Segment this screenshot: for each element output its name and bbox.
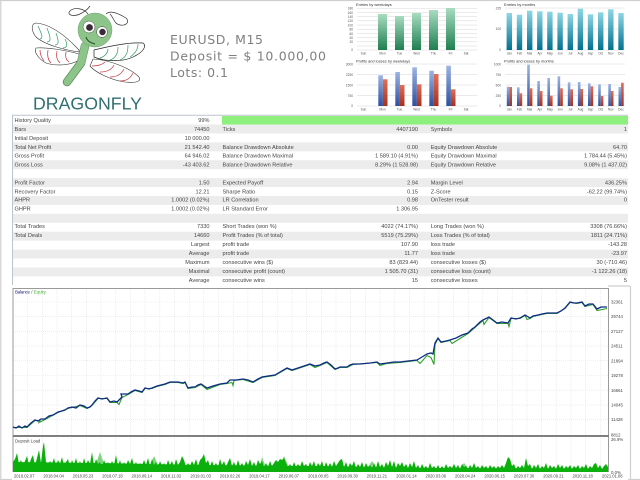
table column 2: values: 64 946.02 [185,154,210,160]
table column 2: values: Largest [191,242,210,248]
chart: entries by weekdays: 20 [349,40,353,44]
table column 3: labels: consecutive wins [222,278,265,284]
table column 2: values: 1.0002 (0.02%) [171,198,210,204]
chart: profits and losses by months: 750 [496,73,501,77]
date axis labels: 2018.11.02 [161,474,182,478]
table column 4: values: 4022 (74.17%) [381,224,418,230]
chart: entries by weekdays: Sat [464,52,469,56]
table column 3: labels: profit trade [222,242,249,248]
chart: entries by weekdays: Mon [379,52,386,56]
load axis labels: 0.0% [611,470,621,475]
chart: profits and losses by weekdays: Mon [379,108,386,112]
date axis labels: 2019.09.30 [337,474,359,478]
date axis labels: 2020.11.18 [573,474,594,478]
table column 4: values: 15 [412,278,418,284]
table column 3: labels: Expected Payoff [222,180,264,186]
date axis labels: 2020.03.06 [426,474,447,478]
icon: antennae [69,6,128,25]
table column 6: values: 0 [624,198,627,204]
chart: profits and losses by weekdays: Sat [464,108,469,112]
table column 4: values: 2.94 [407,180,418,186]
chart: entries by months: 0 [499,48,501,52]
table column 4: values: 5519 (75.29%) [381,233,418,239]
chart grid [13,288,608,472]
chart: profits and losses by months: 0 [499,104,501,108]
table column 6: values: 1 784.44 (5.45%) [584,154,627,160]
icon: upper left wing [32,23,79,52]
date axis labels: 2020.09.21 [543,474,564,478]
chart: profits and losses by months: Mar [527,108,533,112]
date axis labels: 2018.09.14 [132,474,153,478]
date axis labels: 2019.06.07 [279,474,300,478]
chart: profits and losses by weekdays: Fri [449,108,453,112]
icon: smile [86,37,95,44]
settings text block: Lots: 0.1 [170,65,228,80]
table row shading [13,124,628,276]
chart: entries by months: 225 [496,6,501,10]
balance axis labels: 21894 [611,358,624,363]
table column 1: labels: Gross Loss [14,163,43,169]
date axis labels: 2018.02.07 [14,474,35,478]
table column 6: values: 5 [624,278,627,284]
chart legend: Equity [34,290,47,294]
table column 3: labels: Sharpe Ratio [222,190,255,196]
table column 6: values: -62.22 (99.74%) [587,190,627,196]
chart legend [15,290,47,294]
load spikes, pale [96,452,468,468]
table column 4: values: 11.77 [404,251,418,257]
chart: profits and losses by months: 250 [496,94,501,98]
chart: profits and losses by months: May [547,108,553,112]
table column 1: labels: Bars [14,127,26,133]
chart: entries by weekdays: Thu [431,52,436,56]
table column 5: labels: Loss Trades (% of total) [431,233,490,239]
table column 1: labels: Recovery Factor [14,190,56,196]
chart: profits and losses by months: Nov [608,108,614,112]
chart frame [13,288,608,472]
table column 4: values: 1 589.10 (4.91%) [375,154,418,160]
table column 6: values: 1 [624,127,627,133]
table column 5: labels: Symbols [431,127,452,133]
table column 5: labels: loss trade [431,242,455,248]
balance axis labels: 8812 [611,432,621,438]
chart legend: Balance [15,290,31,294]
table column 6: values: -1 122.26 (18) [592,269,627,275]
table column 4: values: 4407190 [396,127,418,133]
table column 1: labels: Total Net Profit [14,145,52,151]
table column 6: values: 1811 (24.71%) [591,233,627,239]
table column 3: labels: Balance Drawdown Absolute [222,145,294,151]
table column 1: labels: Initial Deposit [14,136,49,142]
date axis labels: 2019.11.21 [367,474,388,478]
chart: entries by weekdays: Sun [361,52,367,56]
chart: profits and losses by weekdays: Sun [361,108,367,112]
table column 3: labels: Profit Trades (% of total) [222,233,283,239]
panel: deposit load chart [13,435,623,478]
history quality bar [222,116,628,124]
table column 6: values: -143.28 [608,242,627,248]
date axis labels: 2019.04.17 [249,474,270,478]
table column 5: labels: Z-Score [431,190,451,196]
balance axis labels: 19278 [611,373,624,378]
table column 6: values: 436.25% [605,180,627,186]
table column 1: labels: History Quality [14,118,51,124]
settings text block: Deposit = $ 10.000,00 [170,48,326,64]
chart: entries by months: Nov [608,52,614,56]
chart: profits and losses by weekdays: 3000 [346,62,353,66]
chart: profits and losses by months: 1000 [494,62,501,66]
balance axis labels: 11428 [611,417,623,422]
table column 3: labels [222,127,294,284]
date axis labels: 2020.07.30 [514,474,535,478]
chart: profits and losses by months: Oct [598,108,603,112]
icon: head [78,13,112,47]
logo: dragonfly mascot [32,6,145,114]
chart: entries by months: Feb [517,52,522,56]
table column 6: values: 9.08% (1 437.02) [584,163,627,169]
table column 5: labels: Equity Drawdown Relative [431,163,496,169]
balance axis labels: 27127 [611,329,624,334]
table column 4: values: 1 505.70 (31) [385,269,418,275]
chart: profits and losses by months [494,58,625,112]
balance axis labels: 32361 [611,300,624,304]
table column 2: values: 7330 [197,224,210,230]
table column 3: labels: Balance Drawdown Maximal [222,154,293,160]
chart: profits and losses by weekdays: Tue [397,108,402,112]
chart: entries by months: Mar [527,52,533,56]
date axis labels: 2021.01.08 [602,474,623,478]
table column 6: values: -23.97 [611,251,627,257]
table column 1: labels: Total Deals [14,233,42,239]
icon: lower right wing [90,59,140,82]
table column 5: labels: consecutive loss (count) [431,269,491,275]
chart title: Profits and losses by weekdays [356,58,410,64]
balance axis labels: 16661 [611,388,624,393]
date axis labels: 2019.08.05 [308,474,329,478]
table column 4: values: 8.29% (1 528.98) [375,163,418,169]
table column 5: labels: loss trade [431,251,455,257]
table column 2: values: 74450 [194,127,210,133]
chart: profits and losses by months: Aug [578,108,583,112]
table column 5: labels: Margin Level [431,180,463,186]
table column 4: values: 0.15 [407,190,418,196]
table column 1: labels: GHPR [14,206,31,212]
chart: entries by weekdays: 80 [349,28,353,32]
chart: profits and losses by months: Jan [507,108,512,112]
load underlay [13,462,608,472]
table column 3: labels: consecutive wins ($) [222,260,273,266]
chart: entries by weekdays: Wed [413,52,420,56]
chart: profits and losses by weekdays: Thu [431,108,436,112]
chart: entries by months: Dec [618,52,624,56]
chart legend: / [31,290,33,294]
date axis labels: 2020.06.15 [484,474,506,478]
table column 4: values [375,127,418,284]
chart label: Deposit Load [15,438,41,444]
table column 2: values: 14660 [194,233,210,239]
equity line [13,302,607,428]
date axis labels: 2018.07.18 [102,474,123,478]
load axis labels [611,437,623,475]
table column 5: labels: Equity Drawdown Absolute [431,145,497,151]
chart: entries by months: 100 [496,27,501,31]
chart: entries by months: Jul [568,52,573,56]
table column 6: values: 3308 (76.66%) [590,224,627,230]
table column 5: labels: Long Trades (won %) [431,224,484,230]
chart title: Entries by weekdays [356,2,392,7]
logo wordmark: DRAGONFLY [33,94,142,114]
icon: lower left wing [35,48,79,65]
table column 4: values: 83 (829.44) [389,260,418,266]
table column 4: values: 107.90 [401,242,418,248]
chart: entries by months: Jan [507,52,512,56]
table column 2: values: Maximum [185,260,210,266]
balance line [13,302,607,428]
chart: profits and losses by weekdays: 1500 [346,84,353,88]
chart: profits and losses by months: Jun [558,108,563,112]
table column 2: values: 99% [198,118,210,124]
table column 2: values: Average [189,278,210,284]
date axis labels [14,474,623,478]
balance axis labels: 14045 [611,402,624,408]
chart: profits and losses by weekdays: 0 [351,104,353,108]
table column 3: labels: Ticks [222,127,236,133]
chart: entries by months: Aug [578,52,583,56]
balance axis labels: 24511 [611,344,623,349]
table column 1: labels: AHPR [14,198,30,204]
date axis labels: 2018.04.04 [43,474,65,478]
table column 6: values: 64.70 [613,145,627,151]
date axis labels: 2018.05.23 [73,474,94,478]
chart: entries by weekdays: 100 [348,24,353,28]
chart: profits and losses by months: Sep [588,108,594,112]
table column 2: values: Maximal [189,269,210,275]
balance axis labels: 29744 [611,314,624,319]
table column 3: labels: profit trade [222,251,249,257]
balance axis labels [611,300,624,438]
table column 1: labels: Gross Profit [14,154,44,160]
panel: balance and equity chart [13,288,624,472]
table column 2: values: 10 000.00 [185,136,210,142]
table column 2: values [171,118,210,284]
load axis labels: 26.9% [611,437,623,442]
chart: entries by months: Sep [588,52,594,56]
chart: profits and losses by weekdays [346,58,477,112]
chart: profits and losses by months: Feb [517,108,522,112]
chart: entries by months [496,2,625,56]
date axis labels: 2019.02.26 [220,474,241,478]
table column 1: labels: Profit Factor [14,180,45,186]
chart: entries by months: Jun [558,52,563,56]
table column 2: values: 21 542.40 [185,145,210,151]
chart: entries by weekdays: 180 [348,6,353,10]
table column 4: values: 1 306.95 [396,206,418,212]
chart: profits and losses by weekdays: 750 [348,94,353,98]
chart: profits and losses by months: 500 [496,84,501,88]
table column 3: labels: consecutive profit (count) [222,269,285,275]
table column 5: labels [431,127,497,284]
chart: entries by weekdays: 40 [349,36,353,40]
panel: statistics table [12,115,628,285]
chart title: Entries by months [504,2,535,7]
table column 5: labels: OnTester result [431,198,469,204]
chart: profits and losses by months: Apr [537,108,543,112]
table column 3: labels: Short Trades (won %) [222,224,277,230]
table column 2: values: -43 403.62 [183,163,210,169]
settings text block [170,32,326,80]
table column 5: labels: consecutive losses [431,278,478,284]
chart: entries by weekdays: 120 [348,19,353,23]
date axis labels: 2020.01.14 [396,474,417,478]
chart: entries by months: Apr [537,52,543,56]
chart: entries by weekdays [348,2,477,56]
chart: entries by weekdays: 140 [348,15,353,19]
chart: entries by weekdays: Fri [449,52,453,56]
table column 3: labels: LR Standard Error [222,206,268,212]
chart: entries by weekdays: Tue [397,52,402,56]
table column 5: labels: Equity Drawdown Maximal [431,154,497,160]
chart: entries by weekdays: 160 [348,11,353,15]
table column 1: labels: Total Trades [14,224,45,230]
table column 2: values: 12.21 [196,190,210,196]
table column 2: values: 1.0002 (0.02%) [171,206,210,212]
settings text block: EURUSD, M15 [170,32,263,47]
load spikes [13,442,608,472]
table column 1: labels [14,118,56,239]
table column 5: labels: consecutive losses ($) [431,260,486,266]
table column 6: values: 30 (-710.46) [597,260,627,266]
chart title: Profits and losses by months [504,58,554,64]
chart: profits and losses by months: Jul [568,108,573,112]
date axis labels: 2020.04.24 [455,474,476,478]
table column 2: values: Average [189,251,210,257]
chart: profits and losses by months: Dec [618,108,624,112]
table column 4: values: 0.00 [407,145,418,151]
table column 3: labels: LR Correlation [222,198,259,204]
icon: upper right wing [94,43,145,61]
chart: entries by weekdays: 60 [349,32,353,36]
chart divider [13,435,609,437]
table column 6: values [584,127,627,284]
chart: entries by months: May [547,52,553,56]
icon: eyes [83,21,107,37]
chart: entries by weekdays: 0 [351,48,353,52]
date axis labels: 2019.01.03 [190,474,212,478]
table column 4: values: 0.98 [407,198,418,204]
chart: profits and losses by weekdays: Wed [413,108,420,112]
table column 3: labels: Balance Drawdown Relative [222,163,292,169]
chart: profits and losses by weekdays: 2250 [346,73,353,77]
table column 2: values: 1.50 [199,180,210,186]
icon: body [67,46,85,82]
chart: entries by months: Oct [598,52,603,56]
